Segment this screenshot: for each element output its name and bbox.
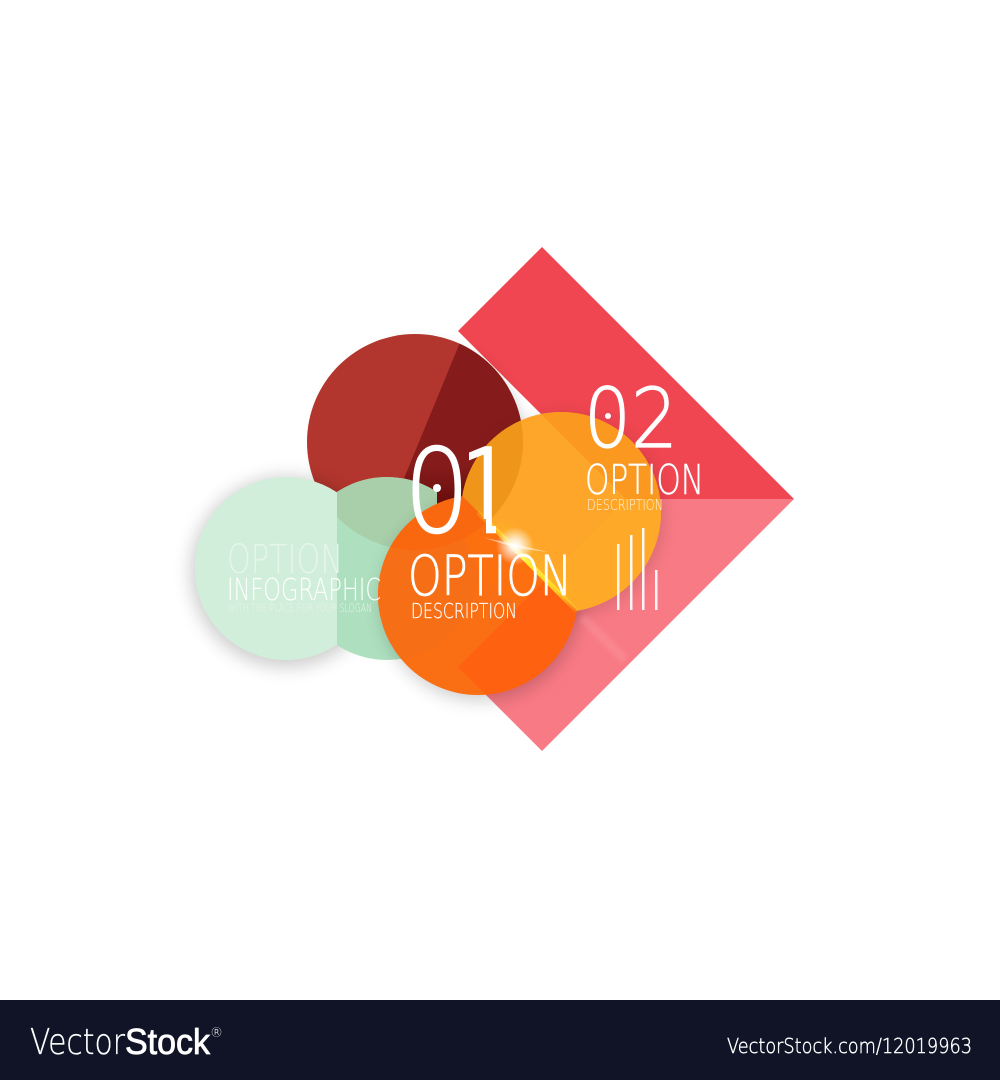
heading: option: OPTION: [408, 544, 572, 608]
text block: option 02: [584, 372, 704, 514]
panel: green circles: [183, 469, 437, 675]
heading: option: OPTION: [585, 456, 704, 504]
description: DESCRIPTION: [411, 599, 517, 623]
footer url: VectorStock.com/12019963: [727, 1034, 972, 1058]
glow: light streak and flare: [478, 512, 625, 660]
flare ray: [485, 538, 548, 552]
amber overlap with upper band: [541, 412, 660, 499]
footer background: [0, 1000, 1000, 1080]
amber circle shadow: [464, 417, 662, 615]
number 02: 02: [584, 372, 678, 467]
number 1: 1: [449, 425, 523, 560]
logo: VectorStock: Vector: [30, 1022, 125, 1063]
diamond upper band: [458, 247, 794, 499]
heading: option faint: OPTION: [227, 537, 343, 583]
text block: option infographic: [227, 537, 381, 615]
heading: infographic: INFOGRAPHIC: [227, 573, 381, 608]
panel: amber circle: [462, 411, 668, 620]
orange overlap with diamond: [458, 582, 577, 695]
slogan: WITH THE PLACE FOR YOUR SLOGAN: [228, 601, 372, 615]
red circle shadow: [314, 340, 526, 552]
green circle shadow: [191, 477, 381, 667]
red circle dark wedge: [404, 344, 521, 504]
amber overlap with lower band: [577, 499, 661, 611]
panel: orange circle: [378, 496, 577, 695]
panel: dark red circle: [307, 334, 526, 504]
diamond lower band: [458, 499, 794, 751]
description: DESCRIPTION: [587, 496, 663, 514]
number 0 dot: [605, 413, 611, 419]
amber overlap with red circle: [462, 420, 523, 520]
soft glow on amber side: [534, 562, 558, 586]
number 0 dot: [433, 484, 441, 492]
green circle right: [337, 477, 437, 660]
green circle left body: [195, 477, 337, 660]
logo: Stock bold: Stock: [125, 1021, 211, 1062]
red circle body: [307, 334, 523, 550]
footer bar: [0, 1000, 1000, 1080]
icon: bar chart: [617, 528, 658, 610]
text block: option 01: [411, 444, 566, 618]
orange tint from green circle: [378, 500, 448, 659]
amber circle body: [461, 412, 661, 612]
pink glare: [582, 617, 625, 660]
orange overlap with amber circle: [461, 412, 661, 612]
number 0: 0: [404, 425, 470, 560]
flare core: [496, 527, 534, 565]
orange circle body: [378, 495, 578, 695]
panel: diamond background: [458, 247, 794, 751]
orange overlap with red circle: [390, 496, 481, 547]
orange circle shadow: [381, 502, 579, 700]
logo: registered mark: ®: [210, 1026, 223, 1041]
light streak: [478, 512, 577, 611]
